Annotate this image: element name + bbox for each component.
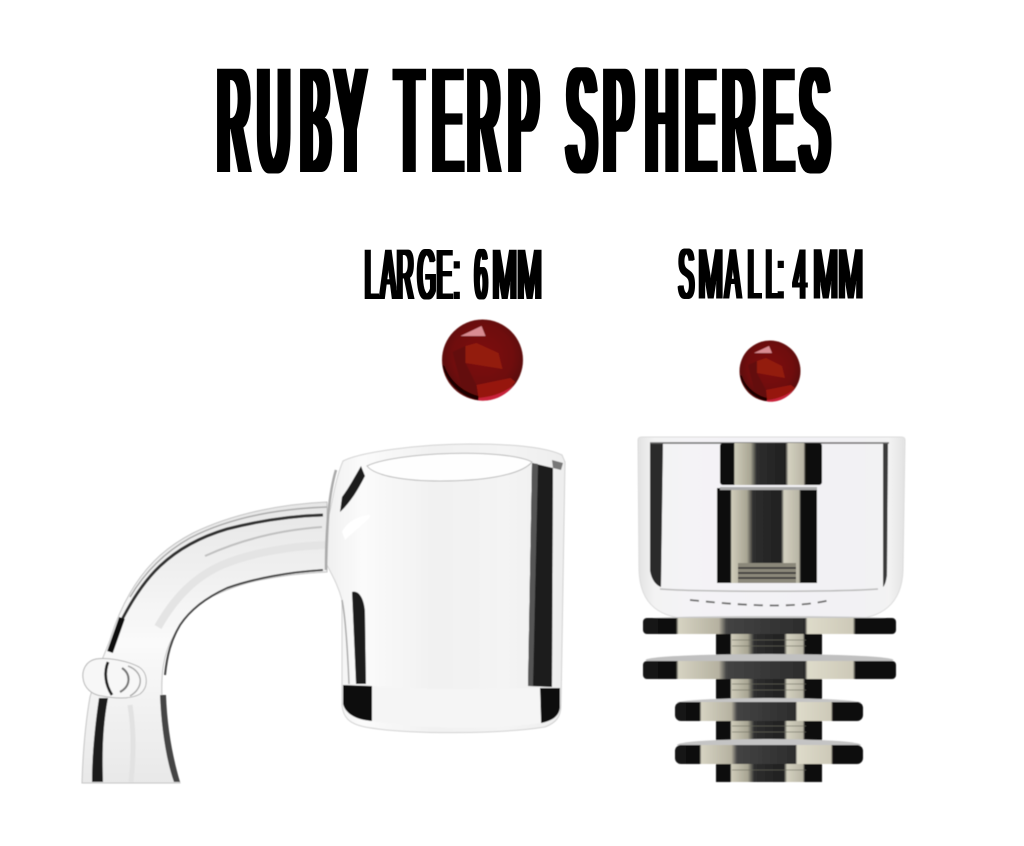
side nub [83,658,146,698]
disc 4 [677,739,861,751]
label: small size [679,235,863,315]
disc 1 [646,616,894,622]
top cap [720,443,822,485]
bowl neck reflections [340,466,365,512]
heat-sink stem [716,630,822,782]
stem ribs [732,640,806,770]
stem sleeve [717,488,817,583]
label: small size: M [698,235,723,314]
base bottom blocks [343,685,372,721]
label: small size: MM [813,235,863,314]
label: large size: MM [492,235,542,315]
thread [738,563,796,583]
illustration: quartz nail on metal heat-sink [638,437,905,782]
tube soft grey band [158,545,327,627]
icon: large ruby sphere [442,320,523,401]
label: large size: LARGE: 6 [365,236,488,315]
illustration: quartz banger with bent tube [82,444,565,783]
leg streaks [92,698,108,782]
bowl left dark bar [352,592,366,684]
bowl [327,444,565,733]
icon: small ruby sphere [740,340,800,402]
disc 3 [677,698,861,708]
quartz bucket [638,437,905,619]
rim ellipse [367,453,532,481]
bowl right dark bar [528,463,553,687]
tube dark reflections [116,515,323,632]
label: small size: S [679,235,694,315]
tube [82,502,327,783]
bucket inner reflections [650,443,663,587]
label: small size: ALL: 4 [725,235,807,315]
glass base sparkle [690,600,830,605]
title: RUBY TERP SPHERES [218,38,829,205]
disc 2 [646,654,894,666]
label: large size [365,235,542,315]
